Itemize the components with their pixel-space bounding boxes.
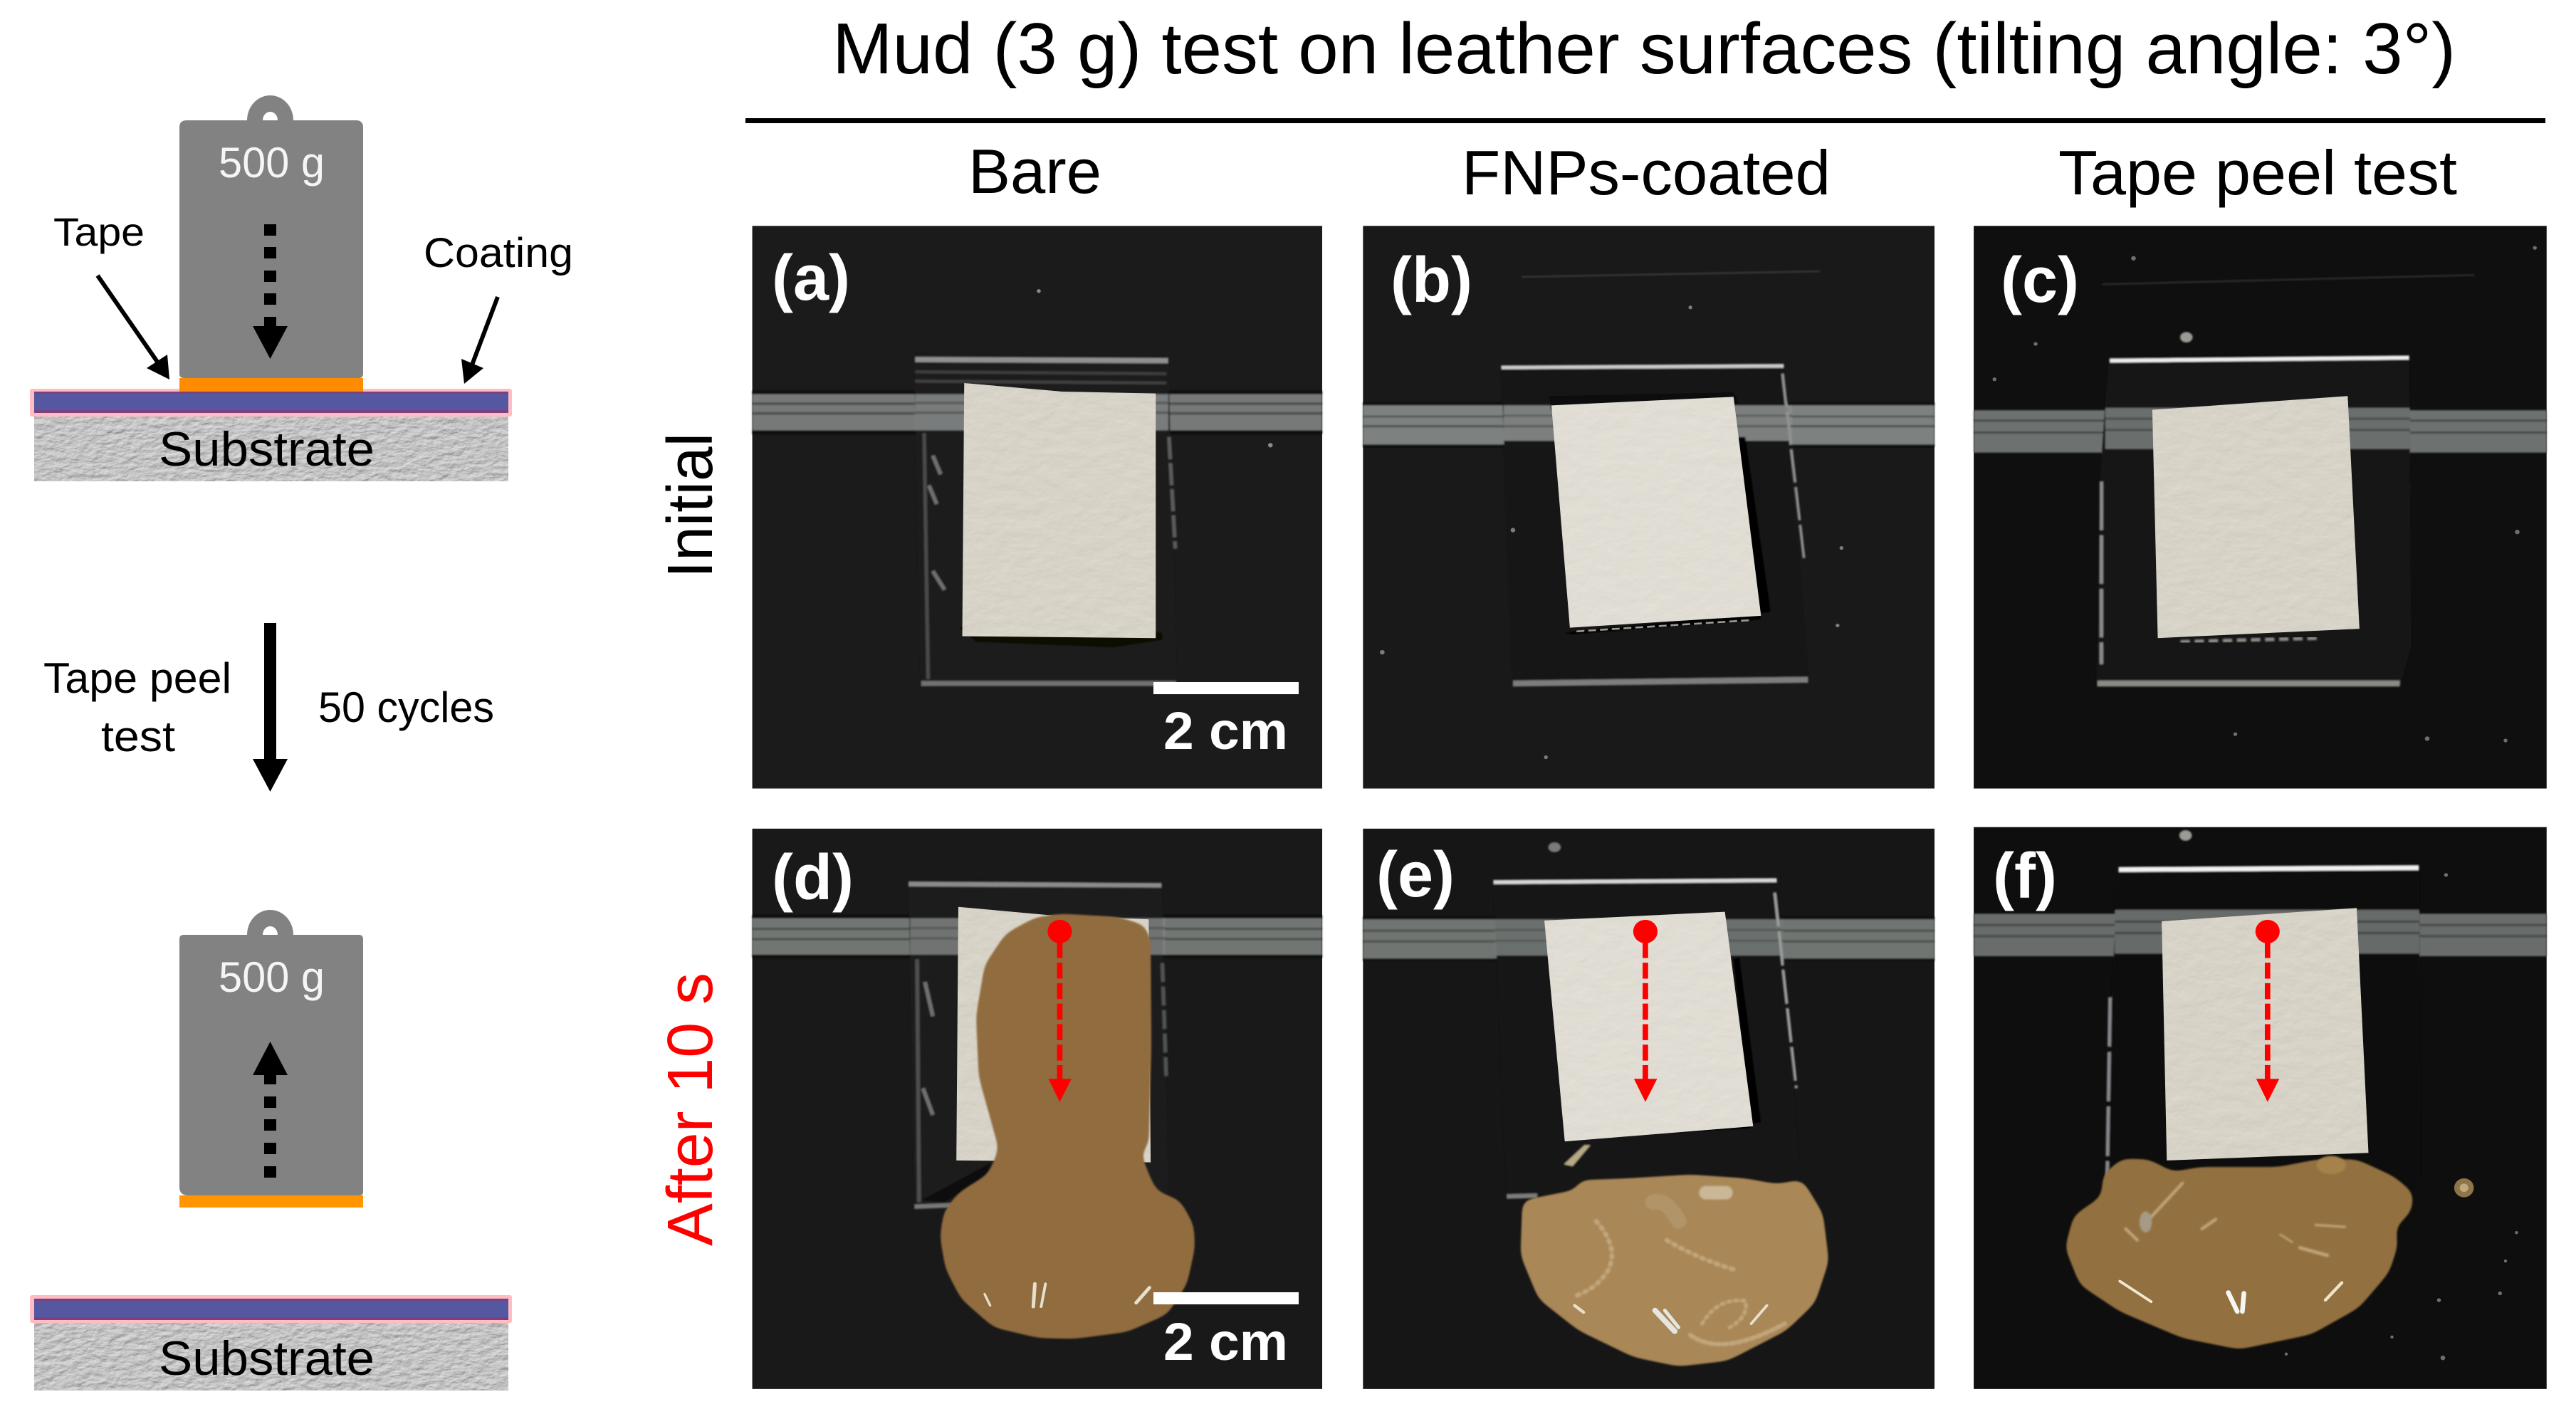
panel: schematic after peel xyxy=(30,910,512,1391)
panel (b): FNPs-coated initial photo xyxy=(1363,226,1934,789)
red flow marker xyxy=(1633,920,1658,1102)
panel (e): FNPs-coated after 10 s photo xyxy=(1363,829,1934,1389)
photo a contents xyxy=(753,226,1322,789)
label: Coating: Coating xyxy=(424,230,573,276)
weight with hook xyxy=(179,95,363,378)
row heading: After 10 s: After 10 s xyxy=(655,973,726,1246)
panel (c): tape peel test initial photo xyxy=(1974,226,2547,789)
title rule xyxy=(745,118,2545,123)
tape strip xyxy=(179,378,363,392)
substrate block xyxy=(34,416,508,481)
weight label: 500 g xyxy=(219,953,325,1001)
process arrow with labels xyxy=(43,623,494,792)
photo f contents xyxy=(1974,827,2547,1389)
column heading: FNPs-coated: FNPs-coated xyxy=(1462,137,1831,208)
mud embedded sticks xyxy=(985,1284,1149,1306)
scale bar label: 2 cm xyxy=(1163,1312,1288,1371)
column heading: Tape peel test: Tape peel test xyxy=(2058,137,2457,208)
weight label: 500 g xyxy=(219,139,325,187)
tape strip xyxy=(179,1195,363,1208)
substrate block xyxy=(34,1323,508,1391)
label: Tape peel test xyxy=(43,654,231,760)
label: Substrate: Substrate xyxy=(159,422,375,476)
label: Tape peel test: test xyxy=(101,713,175,760)
mud embedded sticks xyxy=(1574,1306,1767,1331)
panel label a: (a) xyxy=(772,243,850,314)
coating layer xyxy=(30,389,512,417)
coating layer xyxy=(30,1295,512,1323)
photo c contents xyxy=(1974,226,2547,789)
photo e contents xyxy=(1363,829,1934,1389)
arrow to coating xyxy=(461,297,498,384)
photo d contents xyxy=(753,829,1322,1389)
label: Tape: Tape xyxy=(53,209,145,254)
column heading: Bare: Bare xyxy=(968,136,1101,206)
title: Mud (3 g) test on leather surfaces (tilting angle: 3°) xyxy=(832,9,2456,89)
arrow to tape xyxy=(98,276,169,379)
panel label b: (b) xyxy=(1391,245,1472,316)
panel (a): bare initial photo xyxy=(753,226,1322,789)
mud droplet and specks xyxy=(2285,873,2518,1360)
photo b contents xyxy=(1363,226,1934,789)
downward dashed arrow xyxy=(253,224,288,359)
panel: schematic before peel xyxy=(30,95,573,481)
panel label c: (c) xyxy=(2001,245,2079,316)
mud surface marks xyxy=(1573,1193,1784,1344)
label: Substrate: Substrate xyxy=(159,1331,375,1386)
row heading: Initial: Initial xyxy=(655,433,726,578)
weight with hook xyxy=(179,910,363,1195)
label: 50 cycles: 50 cycles xyxy=(318,684,494,731)
scale bar xyxy=(1153,1292,1299,1304)
scale bar xyxy=(1153,682,1299,694)
label: Tape peel test: Tape peel xyxy=(43,654,231,702)
red flow marker xyxy=(2256,920,2280,1102)
large down arrow xyxy=(253,623,288,792)
red flow marker xyxy=(1047,920,1072,1102)
mud surface marks xyxy=(2126,1156,2346,1255)
upward dashed arrow xyxy=(253,1042,288,1178)
mud embedded sticks xyxy=(2120,1281,2342,1311)
panel label d: (d) xyxy=(772,842,854,913)
panel (f): tape peel test after 10 s photo xyxy=(1974,827,2547,1389)
panel label f: (f) xyxy=(1993,841,2057,912)
panel label e: (e) xyxy=(1376,839,1455,911)
panel (d): bare after 10 s photo xyxy=(753,829,1322,1389)
scale bar label: 2 cm xyxy=(1163,701,1288,760)
